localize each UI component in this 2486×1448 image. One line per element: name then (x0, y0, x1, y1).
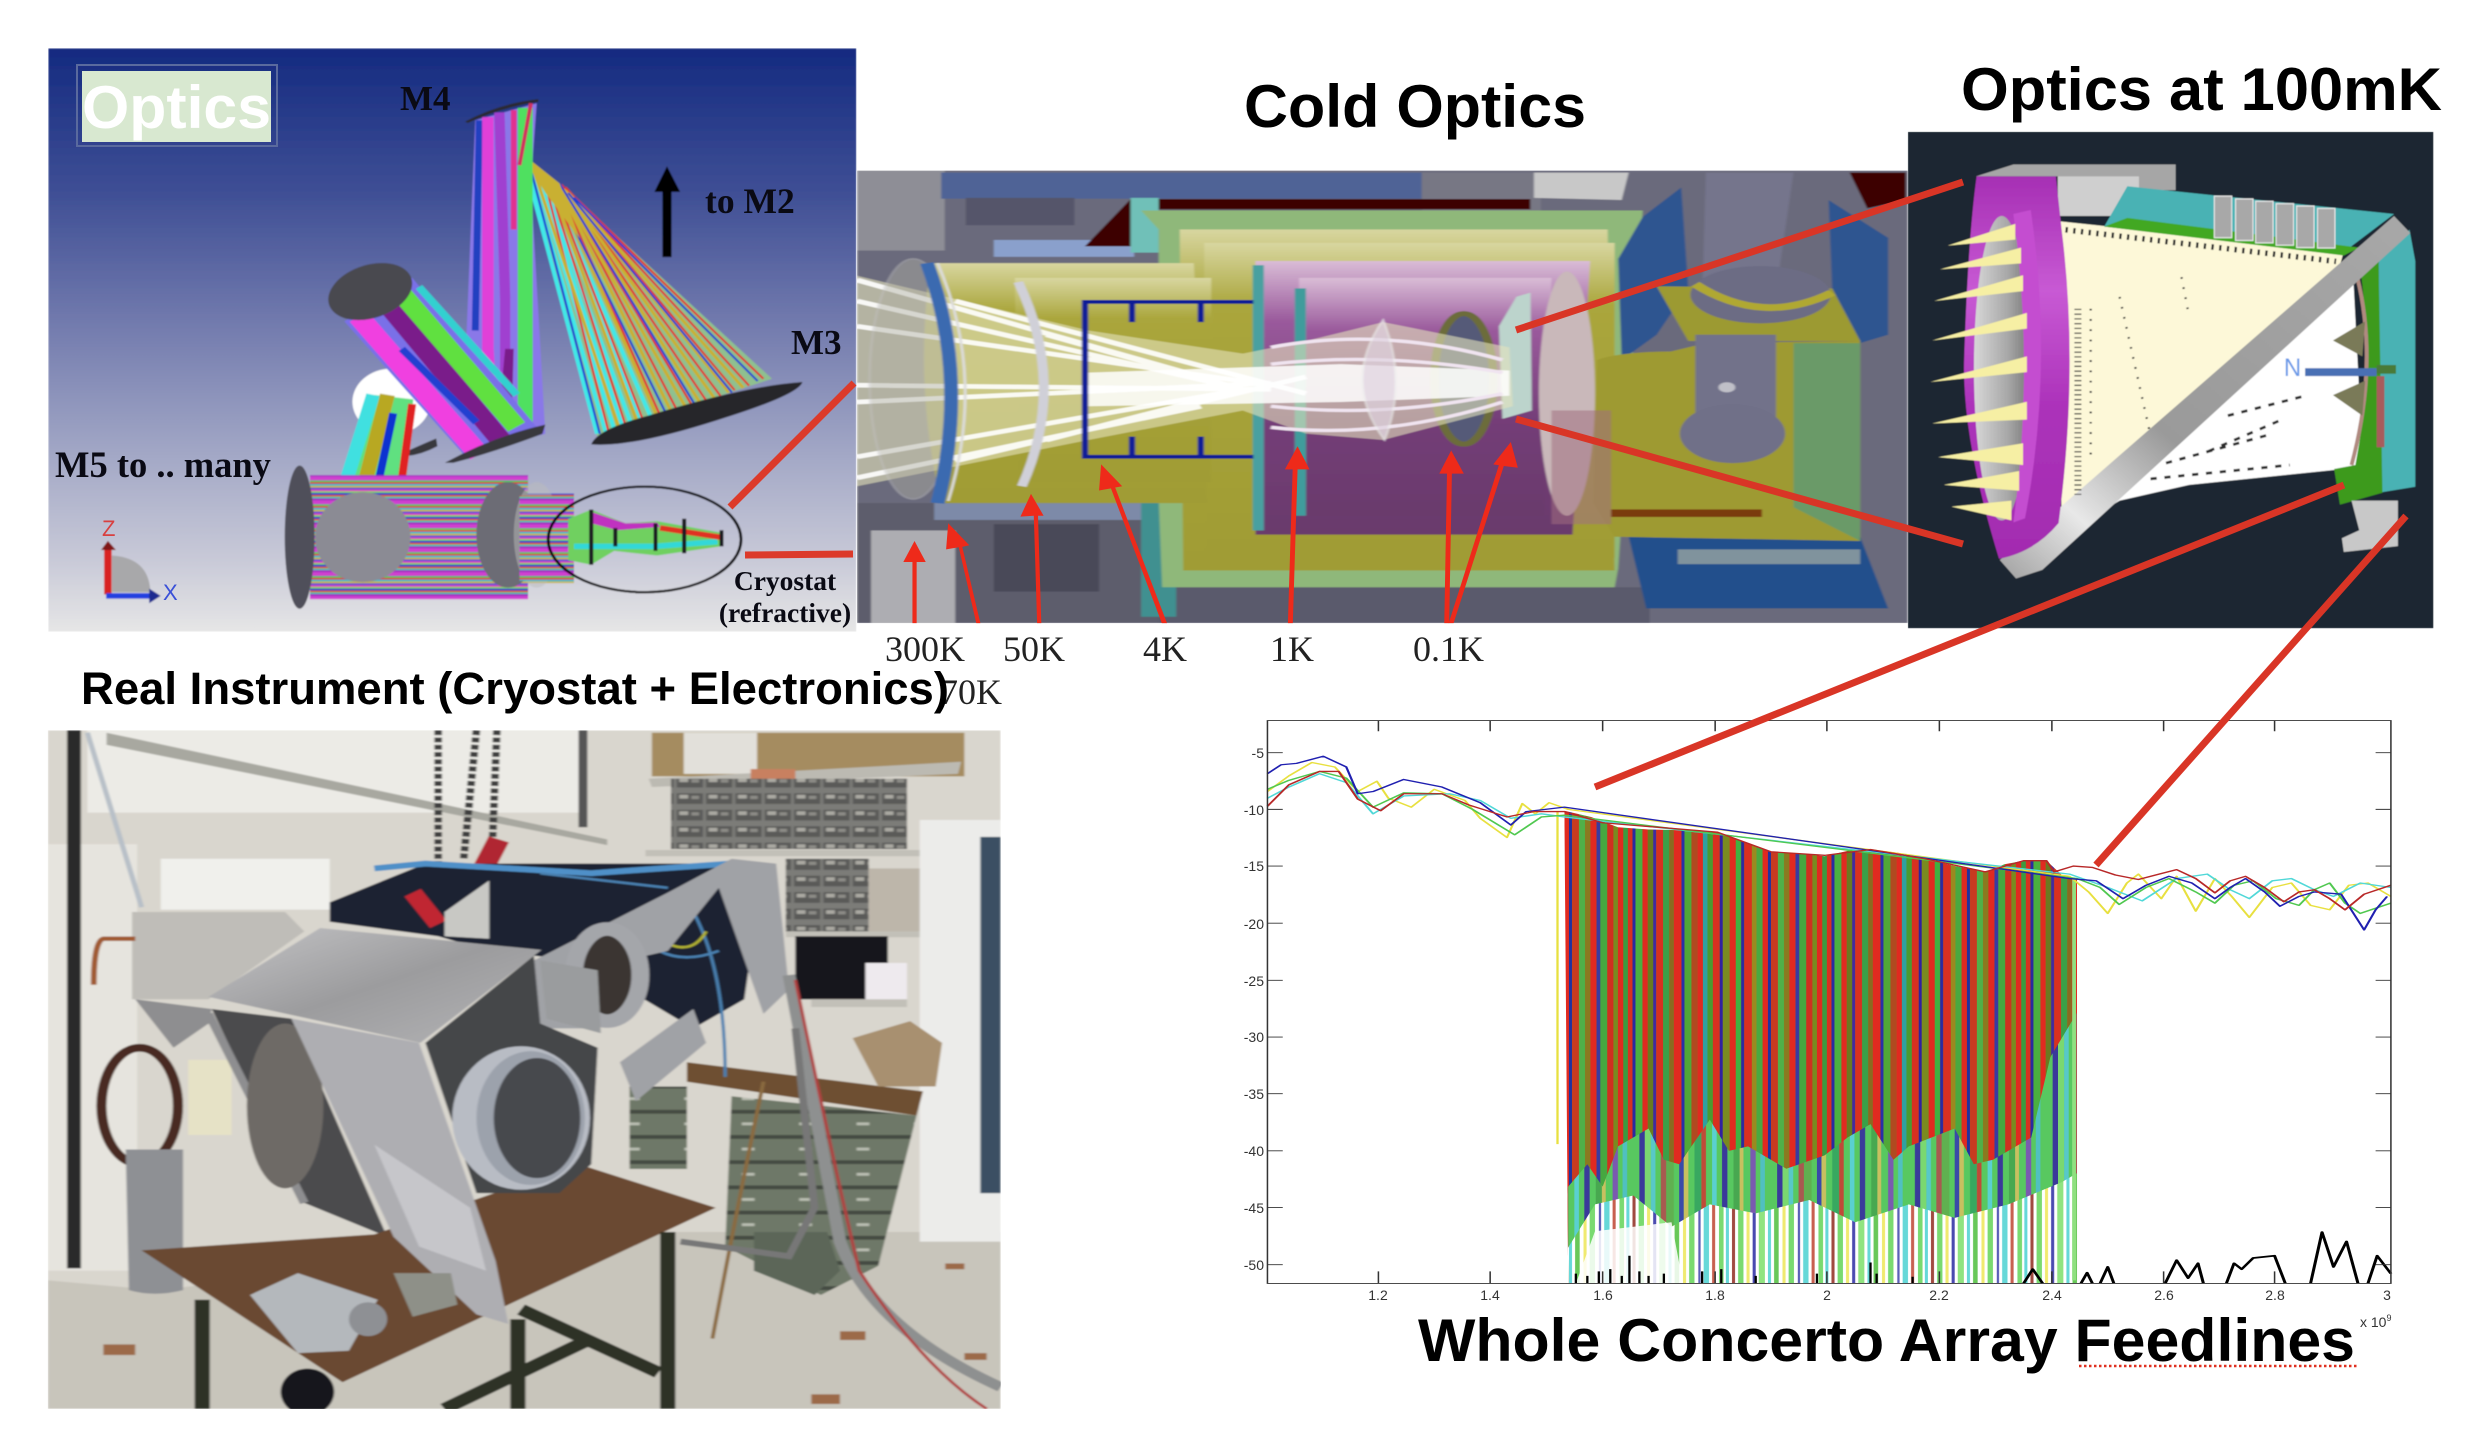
blue trace (1267, 756, 2387, 930)
M5 mirror disc (328, 262, 413, 321)
foreground tape roll (281, 1369, 334, 1415)
temperature labels: 0.1K (1413, 629, 1484, 669)
round flange (452, 1046, 590, 1190)
yellow trace (1267, 762, 2391, 917)
grey lens (1974, 216, 2030, 520)
panel: optics at 100mK CAD view (1908, 132, 2433, 628)
chart y-axis labels: -10 (1244, 802, 1264, 818)
chart y-axis labels: -45 (1244, 1200, 1264, 1216)
chart x-axis labels: 1.6 (1593, 1287, 1613, 1303)
beam M4 down (466, 103, 545, 452)
label: M4: M4 (400, 79, 451, 118)
dip colour band lower (1564, 1173, 2077, 1283)
hook and red sling (480, 839, 499, 876)
olive 50K-4K shells (1180, 229, 1615, 570)
table frame (202, 1232, 668, 1409)
heading: Whole Concerto Array Feedlines: Whole Concerto Array Feedlines (1418, 1307, 2355, 1374)
chart x-axis labels: 2.2 (1929, 1287, 1949, 1303)
horn cones (2333, 322, 2365, 416)
chart y-axis labels: -30 (1244, 1029, 1264, 1045)
white connector box (188, 1060, 232, 1135)
spellcheck underline (2079, 1365, 2357, 1367)
chart axis exponent: x 10 (2360, 1314, 2386, 1330)
focal plate (1499, 293, 1532, 419)
lower frame (857, 503, 1650, 623)
temperature labels: 1K (1270, 629, 1314, 669)
yellow outlier line (1556, 812, 1559, 1144)
label: M5 to .. many: M5 to .. many (55, 444, 271, 485)
ray bundle (857, 276, 1513, 486)
connector: cold optics to 100mK optics (1516, 182, 1963, 544)
north indicator: N (2284, 355, 2301, 382)
coil of hose (101, 1048, 178, 1164)
blue side panels (1618, 187, 1888, 608)
chains (438, 730, 497, 931)
lab wall (48, 730, 1001, 1409)
M4 mirror (465, 99, 538, 123)
north indicator (2284, 355, 2396, 447)
chart x-axis labels: 1.8 (1705, 1287, 1725, 1303)
lower fold mirrors (445, 425, 545, 463)
floor tiles (103, 1263, 987, 1404)
sub-K ring (1434, 314, 1493, 444)
heading: Real Instrument: Real Instrument (Cryostat + Electronics) (81, 663, 949, 714)
chart y-axis labels (1244, 745, 1264, 1273)
dip sparse base (1576, 1222, 1683, 1283)
connector: 100mK optics to spectrum (1595, 485, 2406, 865)
1K lens (1362, 320, 1396, 440)
chart y-axis labels: -5 (1252, 745, 1264, 761)
pipes (67, 730, 587, 1268)
feed horn beams (1930, 224, 2027, 520)
label: to M2: to M2 (705, 181, 795, 221)
dip colour band middle (1564, 1012, 2077, 1283)
temperature labels: 300K (885, 629, 965, 669)
connector: cryostat to cold optics (730, 383, 854, 555)
plot area (1267, 721, 2391, 1283)
green outer shell (1141, 211, 1643, 587)
teal top band (2104, 186, 2394, 254)
wooden table (142, 1164, 716, 1382)
actuator on leg (394, 1273, 457, 1317)
chart x-axis labels: 3 (2383, 1287, 2391, 1303)
front plate (291, 1019, 508, 1324)
chart x-axis labels: 2 (1823, 1287, 1831, 1303)
cables and electronics mass (330, 864, 757, 1077)
noise floor spikes (1576, 1256, 1913, 1283)
temperature labels (885, 629, 1484, 712)
top strip details (857, 171, 1906, 257)
connectors row (2214, 196, 2335, 248)
scattered ray dots (2066, 230, 2336, 495)
chart y-axis labels: -15 (1244, 858, 1264, 874)
white rear disc (352, 369, 430, 435)
cryostat ring (548, 487, 741, 592)
wall poster (161, 859, 330, 910)
cream ray cone (2058, 221, 2344, 514)
lens bright band (2013, 210, 2041, 522)
chart x-axis labels: 1.2 (1368, 1287, 1388, 1303)
chart x-axis labels: 2.8 (2265, 1287, 2285, 1303)
rear right cryostat section (534, 859, 789, 1028)
icon: axes triad (101, 541, 161, 603)
magenta lens ring (1964, 176, 2070, 559)
panel: cold optics cutaway (857, 171, 1908, 671)
small plate right (540, 961, 601, 1033)
green top band (2104, 218, 2359, 255)
label: cryostat refractive: Cryostat (734, 565, 836, 596)
chart y-axis labels: -50 (1244, 1257, 1264, 1273)
chart y-axis labels: -25 (1244, 973, 1264, 989)
right green band (2334, 261, 2382, 505)
top housing (1976, 165, 2176, 190)
relay cylinder (285, 466, 574, 609)
red trace (1267, 771, 2391, 910)
axis letter X: X (163, 580, 178, 605)
plot frame and ticks (1267, 721, 2391, 1283)
pumping tube (1680, 173, 1832, 463)
chart x-axis labels: 1.4 (1480, 1287, 1500, 1303)
heading: Optics at 100mK: Optics at 100mK (1961, 56, 2442, 123)
white lower cone (2114, 284, 2361, 504)
door (920, 820, 1001, 1242)
window and disks (1539, 272, 1595, 516)
dip colour band upper (1564, 807, 2077, 1285)
diagonal bar (2000, 216, 2410, 579)
green edge line (2072, 879, 2077, 1280)
grey gas bottle (126, 1150, 183, 1294)
teal baffles (1253, 265, 1306, 530)
chart axis exponent: 9 (2386, 1313, 2391, 1323)
wrinkled focal surface (2352, 277, 2367, 465)
temperature labels: 50K (1003, 629, 1065, 669)
chart y-axis labels: -40 (1244, 1143, 1264, 1159)
actuator cylinder (250, 1273, 387, 1353)
dark interior (425, 956, 598, 1193)
cryostat refractive optics (568, 510, 722, 565)
chart y-axis labels: -20 (1244, 916, 1264, 932)
temperature labels: 4K (1143, 629, 1187, 669)
M3 mirror (591, 382, 802, 445)
chart x-axis labels: 2.4 (2042, 1287, 2062, 1303)
upper ring (574, 929, 640, 1021)
cryostat dark side (212, 1009, 387, 1237)
axis letter Z: Z (102, 516, 115, 541)
workbench and drawers (630, 1021, 942, 1295)
M3 to M4 ray fan (519, 152, 772, 436)
label: M3: M3 (791, 323, 842, 362)
chart y-axis labels: -35 (1244, 1086, 1264, 1102)
side rails (135, 999, 212, 1048)
heading: Cold Optics: Cold Optics (1244, 73, 1586, 140)
panel: optics ray trace (48, 48, 856, 632)
chart x-axis labels: 2.6 (2154, 1287, 2174, 1303)
beam into relay (340, 392, 417, 476)
floor (48, 1232, 1001, 1409)
entrance window lens (870, 259, 965, 503)
wall shelf (107, 733, 607, 845)
temperature arrows (903, 442, 1518, 624)
chart x-axis labels (1368, 1287, 2391, 1303)
chart: whole array feedline transmission (1267, 721, 2391, 1285)
green trace (1267, 771, 2391, 913)
label: Optics box: Optics (82, 74, 271, 141)
rear panel (132, 912, 304, 999)
storage shelves (645, 733, 964, 1007)
black trace (2024, 1232, 2391, 1283)
50K lens (1018, 282, 1044, 486)
label: cryostat refractive: (refractive) (719, 597, 851, 628)
floor cables (789, 975, 1001, 1387)
beam from M5 mirror (344, 278, 542, 459)
blue 4K bracket (1085, 302, 1253, 457)
bottom connector (2342, 501, 2398, 552)
rear cylinder (620, 1009, 706, 1101)
temperature labels: 70K (940, 672, 1002, 712)
icon: arrow to M2 (654, 166, 680, 257)
panel: real instrument photo (48, 730, 1001, 1415)
right olive block (1594, 286, 1860, 541)
purple 1K shell (1255, 261, 1590, 535)
resonance dips (1564, 807, 2077, 1285)
axis letters (102, 516, 178, 605)
cyan trace (1267, 774, 2391, 901)
top aluminium plate (209, 928, 542, 1043)
copper pipe (94, 939, 135, 985)
right teal band (2379, 230, 2415, 493)
